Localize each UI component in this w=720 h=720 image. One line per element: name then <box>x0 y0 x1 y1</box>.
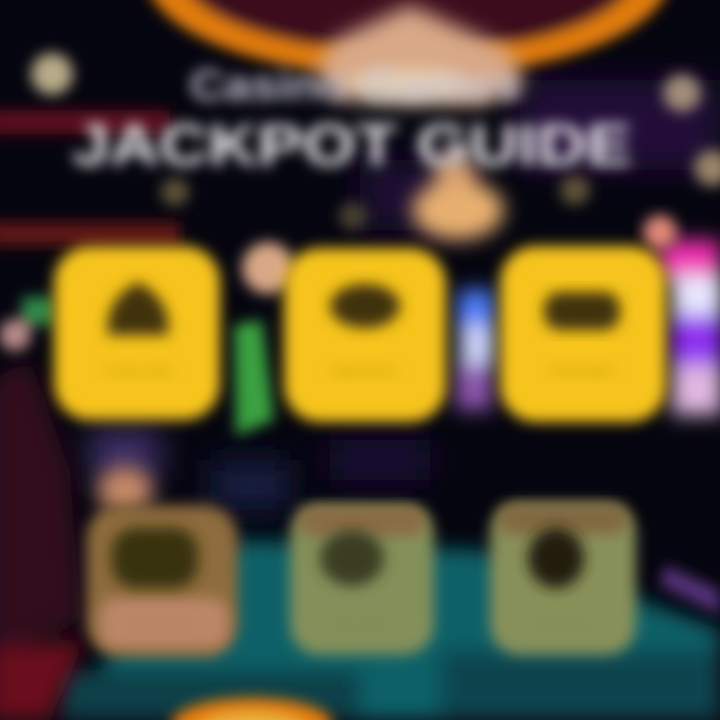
star lights <box>31 53 720 230</box>
red strips <box>0 110 180 246</box>
heading <box>72 61 632 178</box>
panel: lower card 2 <box>290 505 434 655</box>
teal floor <box>60 540 720 720</box>
icon: card 2 <box>330 284 400 328</box>
panel: yellow card 2 <box>284 248 446 422</box>
panel: yellow card 3 <box>500 246 666 422</box>
lower card 3 text: Slot floors <box>532 617 592 631</box>
panel: lower card 3 <box>490 503 636 655</box>
top arch <box>146 0 670 77</box>
bottom orange badge <box>172 698 332 720</box>
icon: card 1 <box>108 282 168 335</box>
icon: lower card 2 <box>320 530 384 586</box>
heading line 1: Casino Games <box>190 61 520 110</box>
hand accent <box>97 466 153 514</box>
lower card 2 text: Card rooms <box>326 617 394 631</box>
icon: card 3 <box>544 292 620 330</box>
purple accent right <box>660 565 720 615</box>
red curtain left <box>0 360 85 720</box>
panel: yellow card 1 <box>54 246 220 420</box>
background glows <box>90 80 720 510</box>
card 2 text: Big bonus <box>333 363 397 378</box>
rainbow lights <box>456 240 720 415</box>
chandelier <box>315 5 525 105</box>
green strip <box>0 242 294 436</box>
panel: lower card 1 <box>86 505 238 657</box>
icon: lower card 1 <box>112 528 198 588</box>
heading line 2: JACKPOT GUIDE <box>72 113 632 178</box>
card 1 text: Lucky spin <box>104 363 172 378</box>
card 3 text: Free plays <box>550 363 614 378</box>
lower card 1 text: Table games <box>124 617 196 631</box>
chandelier lower ornament <box>412 156 504 240</box>
icon: lower card 3 <box>528 528 584 588</box>
peach light right <box>643 215 677 249</box>
